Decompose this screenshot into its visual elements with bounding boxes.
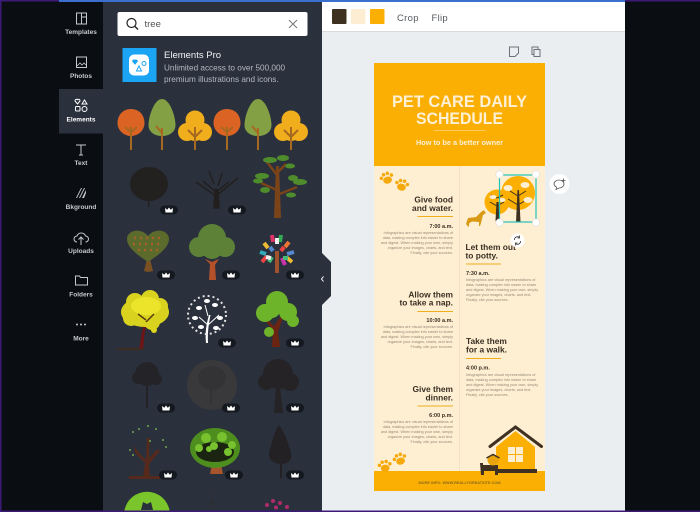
toolbar: Flip [432, 13, 448, 24]
nav: Elements active tab [59, 89, 103, 134]
schedule: walk: Finally, cite your sources. [466, 393, 509, 397]
poster body [374, 63, 545, 491]
schedule: let them out: organize your images, charts, and text. [466, 293, 531, 297]
elements pro promo: Elements Pro [164, 50, 221, 61]
schedule: walk: for a walk. [466, 344, 507, 354]
nav: Folders [69, 276, 93, 298]
heart tree [127, 231, 169, 272]
schedule: dinner: dinner. [426, 392, 453, 402]
schedule: give food: organize your images, charts, and text. [388, 246, 453, 250]
schedule: dinner: Give them [412, 384, 453, 394]
colourful tree [260, 235, 294, 273]
bright green tree [256, 291, 299, 347]
yellow blossom tree [116, 290, 169, 350]
nav: Photos [70, 57, 92, 80]
schedule: walk [466, 336, 538, 397]
elements pro promo: premium illustrations and icons. [164, 75, 279, 84]
top blue bar [59, 0, 625, 2]
schedule: give food: and digest. When making your own, simply [381, 241, 453, 245]
schedule: nap: Infographics are visual representations of [384, 325, 454, 329]
nav: Folders: Folders [69, 292, 93, 298]
poster header: How to be a better owner [416, 138, 503, 147]
panel collapse handle [322, 253, 331, 305]
schedule: give food: Give food [414, 194, 453, 204]
white leaf tree [188, 296, 226, 343]
nav: More [73, 324, 89, 342]
nav: Bkground: Bkground [66, 204, 96, 211]
nav: Elements active tab: Elements [67, 116, 96, 124]
faint circle tree [187, 360, 237, 410]
toolbar [322, 2, 625, 32]
search box: tree [144, 19, 161, 30]
premium crown badges [157, 206, 304, 480]
schedule: let them out [466, 242, 538, 302]
paw prints bottom [377, 451, 408, 472]
schedule: give food [381, 194, 454, 255]
poster [374, 63, 545, 491]
schedule: nap: and digest. When making your own, simply [381, 335, 453, 339]
bright bush tree [190, 428, 240, 474]
schedule: dinner: and digest. When making your own, simply [381, 430, 453, 434]
schedule: dinner [381, 384, 454, 444]
faint dark tree [132, 362, 162, 408]
schedule: walk: 4:00 p.m. [466, 366, 490, 372]
schedule: walk: Infographics are visual representations of [466, 373, 536, 377]
page action icons [510, 47, 540, 56]
nav: Bkground [66, 188, 96, 211]
poster header: SCHEDULE [416, 109, 503, 128]
schedule: give food: Finally, cite your sources. [410, 251, 453, 255]
schedule: let them out: 7:30 a.m. [466, 271, 490, 277]
schedule: nap [381, 290, 454, 349]
nav: Text: Text [75, 160, 88, 167]
poster header [374, 63, 545, 166]
schedule: give food: 7:00 a.m. [429, 224, 453, 230]
schedule: dinner: data, making complex info easier to share [383, 425, 453, 429]
schedule: let them out: data, making complex info easier to share [466, 283, 536, 287]
nav: Photos: Photos [70, 73, 92, 80]
schedule: dinner: Infographics are visual representations of [384, 420, 454, 424]
schedule: dinner: Finally, cite your sources. [410, 440, 453, 444]
canvas area [322, 2, 625, 510]
schedule: let them out: Let them out [466, 242, 516, 252]
toolbar: Crop [397, 13, 419, 24]
schedule: walk: and digest. When making your own, simply [466, 383, 538, 387]
schedule: nap: Allow them [408, 290, 453, 300]
schedule: let them out: to potty. [466, 251, 498, 261]
search box [118, 12, 308, 36]
nav: Uploads: Uploads [68, 248, 94, 255]
schedule: nap: to take a nap. [399, 298, 453, 308]
poster header: PET CARE DAILY [392, 92, 528, 111]
schedule: give food: and water. [412, 203, 453, 213]
nav: Text [75, 145, 88, 167]
sidebar navigation [59, 13, 103, 342]
elements pro promo: Unlimited access to over 500,000 [164, 64, 286, 72]
poster footer: MORE INFO: WWW.REALLYGREATSITE.COM [418, 481, 500, 485]
dark leafy tree [258, 359, 299, 413]
selection frame [496, 171, 540, 226]
poster footer [374, 471, 545, 491]
schedule: nap: organize your images, charts, and text. [388, 340, 453, 344]
tree row: autumn trees [118, 99, 308, 150]
schedule: nap: 10:00 a.m. [426, 318, 453, 324]
side panel [103, 2, 322, 510]
schedule: walk: Take them [466, 336, 507, 346]
dark pine tree [269, 425, 291, 478]
nav: Templates: Templates [65, 29, 97, 36]
green round tree [189, 224, 235, 280]
schedule: dinner: organize your images, charts, and text. [388, 435, 453, 439]
schedule: nap: Finally, cite your sources. [410, 345, 453, 349]
schedule: walk: organize your images, charts, and text. [466, 388, 531, 392]
nav: Templates [65, 13, 97, 36]
schedule: walk: data, making complex info easier to share [466, 378, 536, 382]
schedule: let them out: and digest. When making your own, simply [466, 288, 538, 292]
cut-off colourful tree [265, 499, 289, 510]
bare tree [196, 171, 238, 208]
branching tree with dots [129, 425, 167, 479]
nav: Uploads [68, 233, 94, 255]
schedule: nap: data, making complex info easier to share [383, 330, 453, 334]
leafy tree with thin crown [253, 155, 307, 218]
dark tree [130, 167, 168, 207]
schedule: give food: Infographics are visual representations of [384, 231, 454, 235]
cut-off green circle tree [124, 492, 170, 510]
dog illustration [466, 210, 486, 226]
cut-off thin tree [208, 494, 216, 510]
paw prints top [378, 170, 410, 192]
elements pro promo [122, 48, 286, 84]
selected tree illustration group [484, 176, 535, 222]
schedule: dinner: 6:00 p.m. [429, 413, 453, 419]
rotate handle [510, 234, 524, 248]
schedule: give food: data, making complex info easier to share [383, 236, 453, 240]
tree grid [116, 155, 307, 510]
nav: More: More [73, 336, 89, 342]
schedule: let them out: Infographics are visual representations of [466, 278, 536, 282]
schedule: let them out: Finally, cite your sources. [466, 298, 509, 302]
comment button [550, 174, 570, 194]
house and pet illustration [480, 427, 542, 475]
